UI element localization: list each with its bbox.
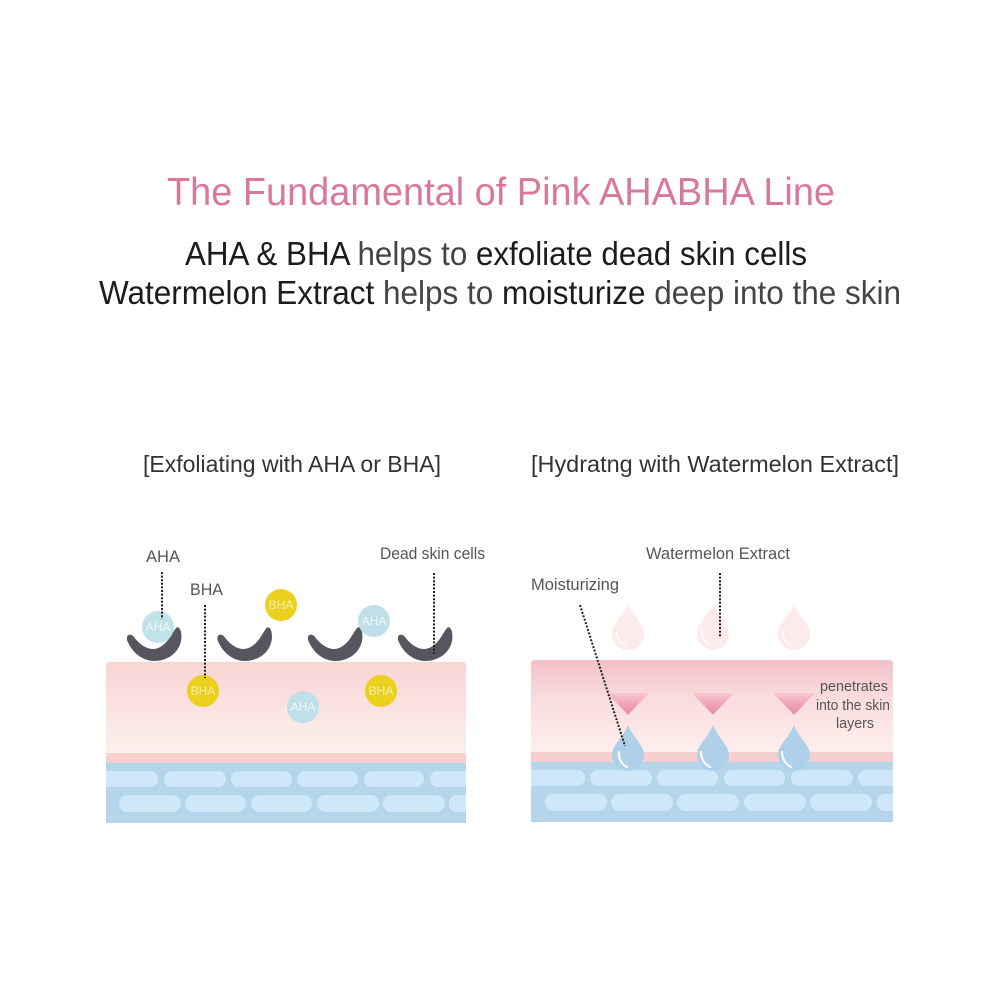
- label: penetrates into the skin layers: [816, 678, 890, 732]
- title: The Fundamental of Pink AHABHA Line: [167, 171, 835, 214]
- BHA molecules: BHA: [269, 598, 293, 612]
- moisturizing drops: [612, 725, 810, 771]
- BHA molecules: [187, 589, 397, 707]
- label: penetrates into the skin layers: layers: [836, 715, 874, 732]
- label: moisturizing: Moisturizing: [531, 575, 619, 594]
- leader lines: [162, 572, 434, 678]
- label: penetrates into the skin layers: penetrates: [820, 678, 888, 695]
- label: dead skin cells: Dead skin cells: [380, 544, 485, 563]
- AHA molecules: AHA: [291, 700, 315, 714]
- watermelon extract drops: [612, 605, 810, 650]
- intro text block: [99, 235, 901, 311]
- label: AHA: AHA: [146, 547, 181, 566]
- drop highlights: [619, 752, 791, 767]
- leader lines: [580, 573, 720, 746]
- panel: exfoliating with AHA or BHA: [106, 451, 485, 823]
- intro text block: Watermelon Extract helps to moisturize deep into the skin: [99, 274, 901, 311]
- intro text block: AHA & BHA helps to exfoliate dead skin cells: [185, 235, 807, 272]
- AHA molecules: AHA: [362, 614, 386, 628]
- label: watermelon extract: Watermelon Extract: [646, 544, 790, 563]
- BHA molecules: BHA: [191, 684, 215, 698]
- skin layers diagram: [531, 660, 893, 822]
- BHA molecules: BHA: [369, 684, 393, 698]
- heading: hydrating: [Hydratng with Watermelon Extract]: [531, 451, 899, 477]
- AHA molecules: AHA: [146, 620, 170, 634]
- dead skin cells crescents: [127, 627, 452, 661]
- AHA molecules: [142, 605, 390, 723]
- skin layers diagram: [106, 662, 466, 823]
- heading: exfoliating: [Exfoliating with AHA or BHA]: [143, 451, 441, 477]
- panel: hydrating with watermelon extract: [531, 451, 899, 822]
- label: penetrates into the skin layers: into the skin: [816, 697, 890, 714]
- penetration arrows: [607, 693, 815, 715]
- label: BHA: BHA: [190, 580, 224, 599]
